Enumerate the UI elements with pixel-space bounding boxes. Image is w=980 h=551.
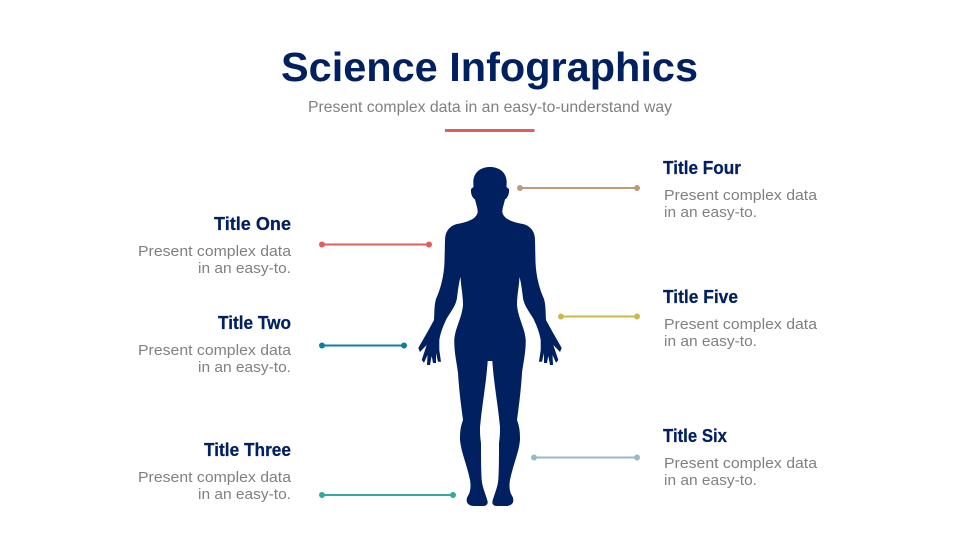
description five: in an easy-to.	[664, 333, 757, 350]
title underline accent	[445, 129, 534, 132]
left item: Title Two	[138, 313, 407, 376]
description two	[138, 342, 292, 376]
human body silhouette	[418, 167, 562, 506]
description six	[664, 455, 818, 489]
right item: Title Five	[558, 287, 818, 350]
description one: in an easy-to.	[198, 260, 291, 277]
description six: in an easy-to.	[664, 472, 757, 489]
heading three: Title Three	[204, 440, 291, 460]
description two: Present complex data	[138, 342, 292, 359]
description one: Present complex data	[138, 243, 292, 260]
description five	[664, 316, 818, 350]
description six: Present complex data	[664, 455, 818, 472]
connector line one	[319, 242, 432, 248]
description two: in an easy-to.	[198, 359, 291, 376]
title: Science Infographics	[281, 44, 698, 90]
connector line two	[319, 342, 407, 348]
description three: in an easy-to.	[198, 486, 291, 503]
heading one: Title One	[214, 214, 291, 234]
connector line six	[531, 454, 640, 460]
heading two: Title Two	[218, 313, 291, 333]
connector line five	[558, 314, 640, 320]
left item: Title Three	[138, 440, 456, 503]
heading five: Title Five	[663, 287, 738, 307]
heading four: Title Four	[663, 158, 741, 178]
description four: in an easy-to.	[664, 204, 757, 221]
subtitle: Present complex data in an easy-to-understand way	[308, 99, 672, 116]
description one	[138, 243, 292, 277]
right item: Title Four	[517, 158, 818, 221]
heading six: Title Six	[663, 426, 727, 446]
description five: Present complex data	[664, 316, 818, 333]
connector line four	[517, 185, 640, 191]
connector line three	[319, 492, 456, 498]
left item: Title One	[138, 214, 432, 277]
description four	[664, 187, 818, 221]
description three: Present complex data	[138, 469, 292, 486]
description three	[138, 469, 292, 503]
description four: Present complex data	[664, 187, 818, 204]
right item: Title Six	[531, 426, 818, 489]
